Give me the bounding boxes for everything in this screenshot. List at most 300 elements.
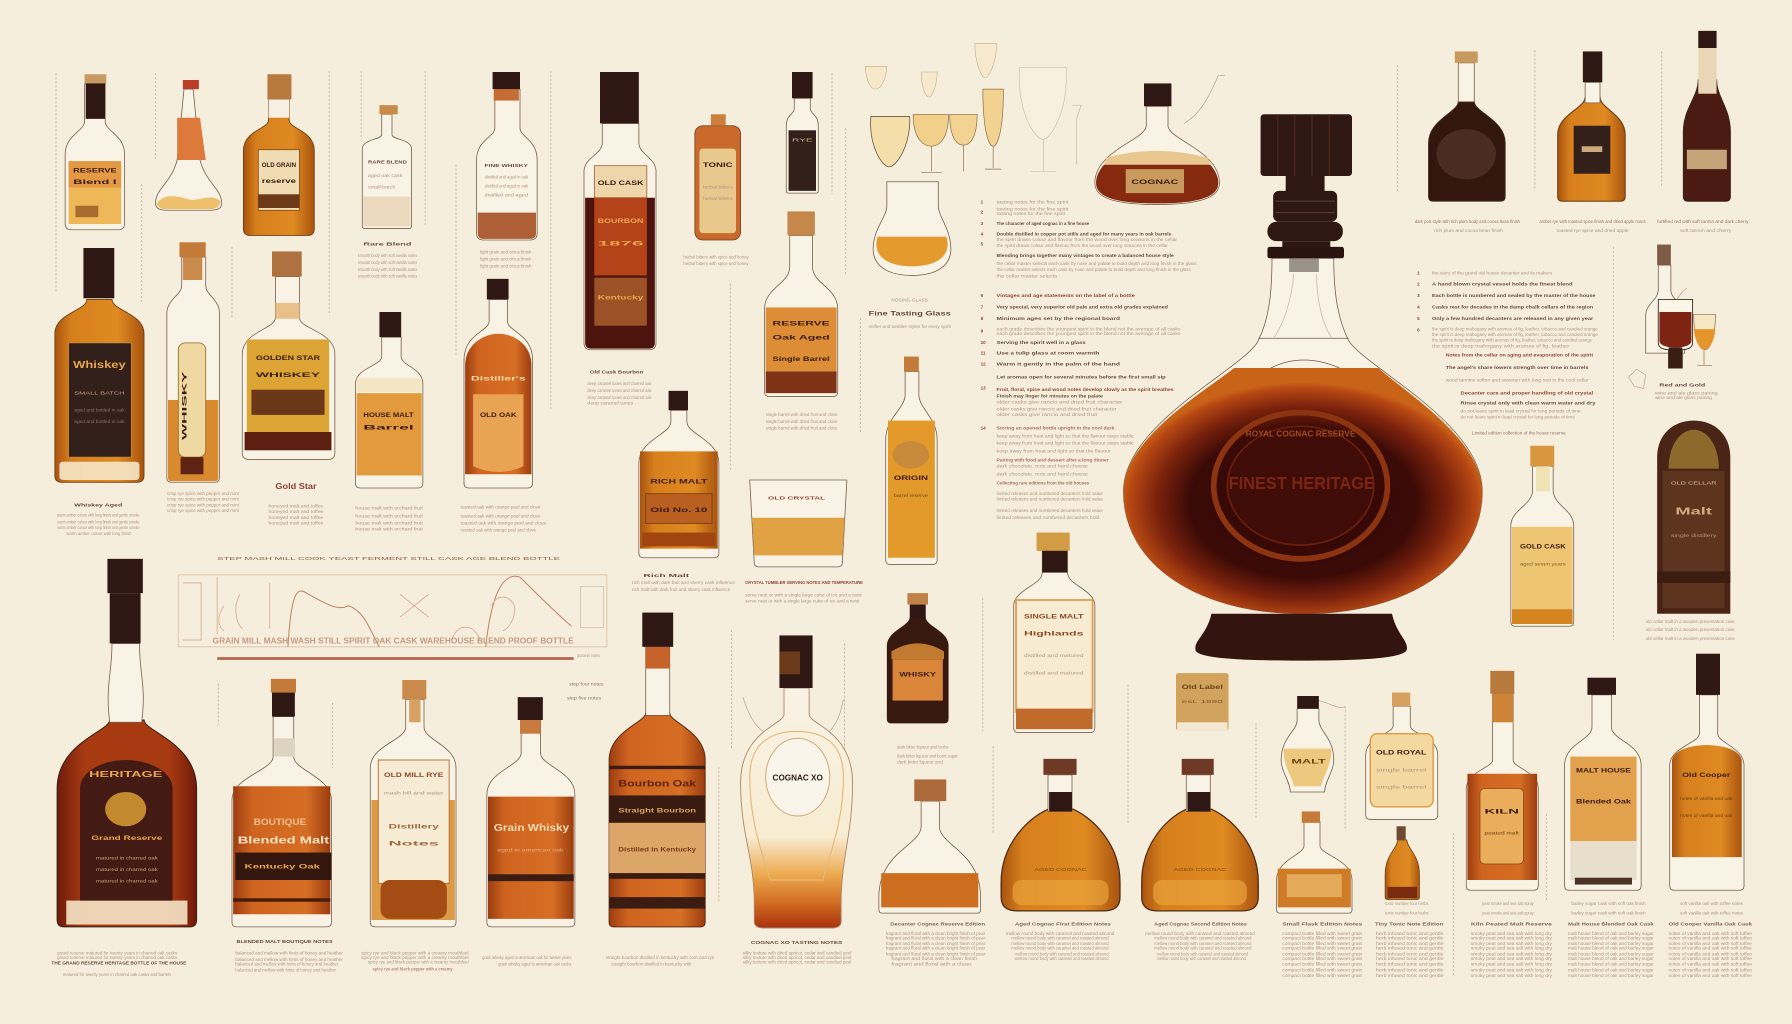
- captions: bottom right columns: malt house blend of oak and barley sugar: [1568, 967, 1654, 972]
- bottle: round amber one: [1001, 759, 1120, 911]
- captions: right text column: Notes from the cellar on aging and evaporation of the spirit: [1446, 353, 1594, 358]
- glass: whiskey tumbler: [750, 480, 847, 567]
- captions: centre text column: older casks give rancio and dried fruit character: [997, 406, 1117, 411]
- bottle: red-orange with black band: Kentucky Oak: [245, 864, 320, 871]
- captions: centre text column: the spirit draws colour and flavour from the wood over long seasons in the cellar: [997, 243, 1169, 248]
- bottle: large deep red with dark label: [57, 559, 197, 927]
- captions: centre text column: the cellar master selects each cask by nose and palate to build depth and long finish in the glass: [997, 261, 1197, 266]
- glasses: champagne group: [865, 43, 1081, 173]
- captions: bottom right columns: smoky peat and sea salt with long dry: [1471, 951, 1553, 956]
- bottle: amber short: [639, 391, 719, 558]
- captions: bottom right columns: fragrant and floral with a clean: [891, 962, 972, 967]
- chart: distillery process map: step five notes: [567, 695, 601, 700]
- bottle: orange tall with clear base: Old Cooper: [1682, 772, 1731, 779]
- bottle: clear neck orange body: [487, 697, 575, 927]
- captions: second row: CRYSTAL TUMBLER SERVING NOTES AND TEMPERATURE: [745, 580, 863, 585]
- captions: centre text column: 7: [981, 305, 984, 310]
- captions: bottom right columns: compact bottle filled with sweet grain: [1282, 946, 1363, 951]
- captions: bottom right columns: smoky peat and sea salt with long dry: [1471, 931, 1553, 936]
- small label card: Old Label: [1182, 684, 1223, 691]
- bottle: cream label amber base: mash bill and water: [384, 790, 444, 795]
- captions: centre text column: each grade describes the youngest spirit in the blend not the average of all casks: [997, 331, 1181, 336]
- captions: centre text column: limited releases and numbered decanters hold value: [997, 508, 1104, 513]
- captions: second row: honeyed malt and toffee: [269, 515, 324, 520]
- bottle: dark wine style: [1683, 31, 1730, 201]
- captions: bottom right columns: fragrant and floral with a clean bright finish of pear: [886, 946, 986, 951]
- bottle: tall orange with bands: Distilled in Kentucky: [618, 846, 696, 853]
- bottle: clear with amber label: [65, 74, 125, 230]
- captions: centre text column: limited releases and numbered decanters hold value: [997, 497, 1104, 502]
- captions: centre text column: Double distilled in copper pot stills and aged for many years in oak barrels: [997, 231, 1172, 236]
- captions: second row: serve neat or with a single large cube of ice and a twist: [745, 598, 860, 603]
- captions: bottom left row: silky texture with dried apricot, cedar and candied peel: [743, 955, 852, 960]
- bottle: tall orange: ORIGIN: [894, 475, 928, 482]
- bottle: orange tall with clear base: [1670, 654, 1744, 890]
- captions: bottom right columns: smoky peat and sea salt with long dry: [1471, 941, 1553, 946]
- captions: top right bottles: dark port style with rich plum body and cocoa bean finish: [1415, 219, 1521, 224]
- captions: top right bottles: dark bitter liqueur and burnt sugar: [897, 754, 958, 759]
- bottle: orange round shoulder: [464, 279, 533, 488]
- captions: top row: deep caramel tones and charred oak: [587, 381, 652, 386]
- captions: top row: herbal bitters with spice and honey: [683, 261, 750, 266]
- bottle: flask with red cap: [155, 80, 222, 210]
- captions: bottom left row: silky texture with dried apricot, cedar and candied peel: [743, 950, 852, 955]
- captions: bottom right columns: herb infused tonic and gentle: [1376, 935, 1444, 940]
- captions: centre text column: 3: [981, 221, 984, 226]
- captions: centre text column: limited releases and numbered decanters hold: [997, 515, 1100, 520]
- captions: bottom right columns: malt house blend of oak and barley sugar: [1568, 941, 1654, 946]
- bottle: clear with amber label: RESERVE: [73, 168, 117, 175]
- bottle: amber with cream label: OLD GRAIN: [262, 162, 296, 169]
- captions: bottom right columns: herb infused tonic and gentle: [1376, 956, 1444, 961]
- captions: centre text column: 9: [981, 329, 984, 334]
- captions: top right bottles: dark bitter liqueur and: [897, 759, 944, 764]
- bottle: pale yellow amber: [1511, 446, 1574, 626]
- captions: bottom right columns: soft vanilla oak with toffee notes: [1680, 910, 1743, 915]
- captions: centre text column: 10: [981, 340, 986, 345]
- bottle: orange round shoulder: OLD OAK: [480, 412, 517, 419]
- bottle: clear with red base: [477, 72, 537, 240]
- captions: centre text column: Serving the spirit well in a glass: [997, 340, 1086, 345]
- bottle: clear neck orange body: aged in american oak: [497, 847, 565, 852]
- captions: centre text column: the cellar master selects each cask by nose and palate to build depth and long finish in the glass: [997, 267, 1191, 272]
- bottle: large deep red with dark label: matured in charred oak: [96, 855, 159, 860]
- captions: bottom right columns: fragrant and floral with a clean bright finish of pear: [886, 935, 986, 940]
- bottle: large amber with dark label: aged and bottled in oak: [74, 419, 126, 424]
- captions: top row: light grain and citrus finish: [480, 263, 532, 268]
- captions: second row: warm amber colour with long finish: [66, 531, 132, 536]
- bottle: clear with red base: distilled and aged in oak: [485, 183, 529, 188]
- chart: distillery process map: step four notes: [569, 682, 603, 687]
- bottle: cream label amber base: OLD MILL RYE: [384, 772, 444, 779]
- bottle: amber with cream label: [243, 74, 314, 235]
- captions: centre text column: 4: [981, 231, 984, 236]
- captions: bottom right columns: Kiln Peated Malt Reserve: [1471, 922, 1553, 927]
- captions: bottom right columns: herb infused tonic and gentle: [1376, 941, 1444, 946]
- bottle: golden with dark band: [242, 251, 335, 459]
- captions: bottom right columns: smoky peat and sea salt with long dry: [1471, 967, 1553, 972]
- captions: bottom right columns: compact bottle filled with sweet grain: [1282, 956, 1363, 961]
- captions: bottom right columns: malt house blend of oak and barley sugar: [1568, 951, 1654, 956]
- captions: right text column: do not leave spirit in lead crystal for long periods of time: [1461, 409, 1581, 414]
- captions: centre text column: Warm it gently in the palm of the hand: [997, 362, 1120, 367]
- captions: second row: toasted oak with orange peel and clove: [461, 505, 541, 510]
- captions: centre text column: older casks give rancio and dried fruit character: [997, 399, 1123, 404]
- captions: bottom right columns: Decanter Cognac Reserve Edition: [890, 922, 985, 927]
- captions: top row: single barrel with dried fruit and clove: [766, 419, 838, 424]
- captions: top right bottles: old cellar malt in a wooden presentation case: [1646, 619, 1736, 624]
- bottle: clear with orange label: MALT HOUSE: [1576, 768, 1631, 775]
- captions: centre text column: keep away from heat and light so that the flavour stays stable: [997, 434, 1135, 439]
- captions: right text column: The angel's share lowers strength over time in barrels: [1446, 365, 1589, 370]
- captions: top row: smooth body with soft vanilla notes: [358, 260, 417, 265]
- captions: top row: Rare Blend: [363, 242, 412, 247]
- bottle: pale gold label: single barrel: [1376, 767, 1426, 772]
- glass: snifter: [873, 182, 951, 275]
- captions: bottom left row: balanced and mellow with hints of honey and heather: [235, 967, 337, 972]
- captions: bottom right columns: peat smoke and sea salt spray: [1482, 901, 1535, 906]
- captions: second row: toasted oak with orange peel and clove: [461, 514, 541, 519]
- bottle: amber with cream top: [355, 312, 423, 488]
- captions: second row: Gold Star: [275, 482, 317, 491]
- captions: right text column: A hand blown crystal vessel holds the finest blend: [1432, 282, 1573, 287]
- captions: bottom left row: COGNAC XO TASTING NOTES: [751, 940, 842, 945]
- captions: bottom right columns: notes of vanilla and oak with soft toffee: [1669, 931, 1753, 936]
- captions: bottom right columns: Old Cooper Vanilla Oak Cask: [1669, 922, 1753, 927]
- captions: bottom right columns: compact bottle filled with sweet grain: [1282, 935, 1363, 940]
- bottle: cream label tall: distilled and matured: [1024, 653, 1085, 658]
- bottle: clear with red base: distilled and aged: [485, 193, 529, 198]
- captions: second row: rich malt with dark fruit and sherry cask influence: [632, 580, 736, 585]
- bottle: clear with orange label: RESERVE: [773, 321, 830, 328]
- captions: centre text column: The character of aged cognac in a fine house: [997, 221, 1090, 226]
- bottle: pale gold label: single barrel: [1376, 785, 1426, 790]
- captions: centre text column: 1: [981, 199, 984, 204]
- bottle: large deep red with dark label: HERITAGE: [89, 770, 163, 779]
- captions: right text column: [1417, 270, 1598, 435]
- bottle: tall deep red: 1876: [598, 241, 644, 248]
- bottle: tall orange with bands: Bourbon Oak: [618, 778, 697, 788]
- captions: top row: smooth body with soft vanilla notes: [358, 267, 417, 272]
- captions: bottom right columns: fragrant and floral with a clean bright finish of pear: [886, 931, 986, 936]
- captions: top right bottles: old cellar malt in a wooden presentation case: [1646, 636, 1736, 641]
- bottle: small dark: [786, 72, 818, 193]
- captions: top right bottles: rich plum and cocoa bean finish: [1434, 228, 1504, 233]
- captions: bottom left row: [51, 939, 852, 977]
- captions: bottom right columns: compact bottle filled with sweet grain: [1282, 941, 1363, 946]
- bottle: red-orange with black band: BOUTIQUE: [254, 817, 306, 827]
- captions: bottom left row: straight bourbon distilled in kentucky with: [611, 962, 692, 967]
- captions: bottom left row: THE GRAND RESERVE HERITAGE BOTTLE OF THE HOUSE: [51, 961, 186, 966]
- bottle: clear fluted with oval label: COGNAC XO: [773, 774, 823, 783]
- captions: bottom right columns: compact bottle filled with sweet grain: [1282, 931, 1363, 936]
- captions: bottom right columns: barley sugar cask with soft oak finish: [1571, 910, 1646, 915]
- bottle: golden with dark band: WHISKEY: [256, 372, 321, 379]
- captions: right text column: Rinse crystal only with clean warm water and dry: [1461, 401, 1596, 406]
- captions: bottom right columns: fragrant and floral with a clean finish: [891, 956, 978, 961]
- captions: bottom right columns: mellow round body with caramel and roasted almond: [1154, 941, 1252, 946]
- captions: second row: house malt with orchard fruit: [355, 526, 424, 531]
- captions: bottom left row: matured for twenty years in charred oak casks and barrels: [63, 972, 171, 977]
- captions: bottom right columns: notes of vanilla and oak with soft toffee: [1669, 951, 1753, 956]
- captions: right text column: Decanter care and proper handling of old crystal: [1461, 390, 1593, 395]
- captions: bottom right columns: notes of vanilla and oak with soft toffee: [1669, 962, 1753, 967]
- captions: right text column: the spirit is deep mahogany with aromas of fig, leather, tobacco and candied orange: [1432, 338, 1593, 343]
- bottle: orange tall narrow: [1466, 671, 1538, 890]
- captions: second row: serve neat or with a single large cube of ice and a twist: [745, 593, 863, 598]
- bottle: round amber one: AGED COGNAC: [1034, 867, 1087, 872]
- bottle: small dark: RYE: [792, 138, 813, 143]
- captions: top row: single barrel with dried fruit and clove: [766, 426, 838, 431]
- bottle: amber with dark label: [1558, 51, 1625, 201]
- captions: top row: single barrel with dried fruit and clove: [766, 412, 838, 417]
- captions: second row: toasted oak with orange peel and clove: [461, 521, 547, 526]
- captions: top right bottles: fortified red with soft tannin and dark cherry: [1657, 219, 1750, 224]
- bottle: clear with orange label: [1565, 678, 1641, 890]
- captions: bottom right columns: herb infused tonic and gentle: [1376, 946, 1444, 951]
- bottle: large deep red with dark label: Grand Reserve: [91, 835, 163, 842]
- bottle: cream label amber base: Notes: [389, 841, 439, 848]
- bottle: round flask: COGNAC: [1131, 179, 1178, 186]
- captions: bottom right columns: compact bottle filled with sweet grain: [1282, 962, 1363, 967]
- bottle: amber with cream top: HOUSE MALT: [363, 412, 415, 419]
- captions: top row: deep caramel tones and charred oak: [587, 395, 652, 400]
- bottle: round amber two: [1142, 759, 1258, 911]
- bottle: tall orange with bands: [609, 613, 705, 927]
- panel: arched dark label: OLD CELLAR: [1671, 481, 1717, 486]
- bottle: clear with red base: FINE WHISKY: [485, 163, 528, 168]
- captions: bottom right columns: smoky peat and sea salt with long dry: [1471, 935, 1553, 940]
- bottle: large amber with dark label: Whiskey: [73, 360, 126, 371]
- bottle: cream label tall: [1014, 533, 1095, 733]
- captions: centre text column: keep away from heat and light so that the flavour: [997, 449, 1112, 454]
- captions: centre text column: Let aromas open for several minutes before the first small sip: [997, 374, 1166, 379]
- captions: bottom left row: grain whisky aged in american oak casks: [498, 962, 571, 967]
- bottle: tall orange with bands: Straight Bourbon: [618, 808, 696, 815]
- captions: bottom right columns: herb infused tonic and gentle: [1376, 962, 1444, 967]
- captions: bottom left row: balanced and mellow with hints of honey and heather: [235, 957, 344, 962]
- captions: bottom right columns: peat smoke and sea salt spray: [1482, 910, 1535, 915]
- bottle: amber short: Old No. 10: [650, 507, 708, 514]
- captions: centre text column: tasting notes for the fine spirit: [997, 199, 1070, 204]
- captions: centre text column: [869, 199, 1197, 520]
- captions: bottom right columns: mellow round body with caramel and roasted almond: [1154, 946, 1252, 951]
- captions: centre text column: the spirit draws colour and flavour from the wood over long seasons in the cellar: [997, 237, 1178, 242]
- captions: top right bottles: soft tannin and cherry: [1680, 228, 1733, 233]
- captions: second row: house malt with orchard fruit: [355, 514, 424, 519]
- bottle: clear with red base: distilled and aged in oak: [485, 174, 529, 179]
- captions: bottom right columns: notes of vanilla and oak with soft toffee: [1669, 967, 1753, 972]
- captions: bottom right columns: Aged Cognac Second Edition Notes: [1154, 922, 1247, 927]
- bottle: tall deep red: BOURBON: [598, 218, 644, 225]
- panel: arched dark label: Malt: [1675, 506, 1713, 517]
- captions: centre text column: dark chocolate, nuts and hard cheese: [997, 463, 1089, 468]
- captions: centre text column: Storing an opened bottle upright in the cool dark: [997, 426, 1115, 431]
- bottle: tall deep red: Kentucky: [598, 294, 644, 301]
- bottle: orange flask: herbal bitters: [703, 196, 733, 201]
- captions: top right bottles: old cellar malt in a wooden presentation case: [1646, 627, 1736, 632]
- captions: bottom right columns: Small Flask Edition Notes: [1282, 922, 1363, 927]
- captions: centre text column: tasting notes for the fine spirit: [997, 211, 1066, 216]
- captions: top right bottles: Red and Gold: [1659, 382, 1705, 387]
- captions: bottom right columns: compact bottle filled with sweet grain: [1282, 967, 1363, 972]
- captions: bottom right columns: compact bottle filled with sweet grain: [1282, 951, 1363, 956]
- bottle: tiny orange: [1385, 826, 1419, 899]
- captions: centre text column: Collecting rare editions from the old houses: [997, 481, 1090, 486]
- bottle: large amber with dark label: aged and bottled in oak: [74, 407, 126, 412]
- captions: bottom right columns: malt house blend of oak and barley sugar: [1568, 935, 1654, 940]
- captions: bottom left row: spicy rye and black pepper with a creamy mouthfeel: [361, 950, 469, 955]
- captions: second row: house malt with orchard fruit: [355, 506, 424, 511]
- bottle: pale small: RARE BLEND: [368, 159, 408, 164]
- bottle: orange flask: TONIC: [703, 162, 733, 169]
- captions: top row: deep caramel tones and charred oak: [587, 388, 652, 393]
- captions: right text column: Limited edition collection of the house reserve: [1472, 430, 1567, 435]
- bottle: large amber with dark label: SMALL BATCH: [74, 390, 125, 395]
- captions: centre text column: keep away from heat and light so that the flavour stays stable: [997, 441, 1135, 446]
- captions: bottom left row: silky texture with dried apricot, cedar and candied peel: [743, 959, 852, 964]
- bottle: tall clear with cream label: [167, 242, 219, 482]
- small label card: est. 1890: [1182, 699, 1225, 704]
- captions: bottom right columns: mellow round body with caramel and roasted almond: [1015, 951, 1109, 956]
- captions: second row: rich malt with dark fruit and sherry cask influence: [632, 587, 731, 592]
- captions: bottom right columns: tonic number four herbs: [1385, 910, 1429, 915]
- captions: bottom right columns: smoky peat and sea salt with long dry: [1471, 973, 1553, 978]
- bottle: cream label tall: SINGLE MALT: [1024, 613, 1084, 620]
- captions: bottom left row: balanced and mellow with hints of honey and heather: [235, 962, 339, 967]
- captions: top right bottles: wine and ale glass pairing: [1655, 395, 1713, 400]
- bottle: dark brown tan cork: [1429, 51, 1505, 201]
- bottle: pale small: small batch: [368, 185, 396, 190]
- chart: distillery process map: process notes: [577, 653, 600, 658]
- captions: top right bottles: toasted rye spice and dried apple: [1557, 228, 1629, 233]
- captions: right text column: 2: [1417, 282, 1420, 287]
- captions: bottom right columns: barley sugar cask with soft oak finish: [1571, 901, 1646, 906]
- bottle: pale gold label: OLD ROYAL: [1376, 749, 1426, 756]
- captions: right text column: the spirit is deep mahogany with aromas of fig, leather: [1432, 343, 1570, 348]
- captions: bottom right columns: notes of vanilla and oak with soft toffee: [1669, 935, 1753, 940]
- captions: bottom left row: BLENDED MALT BOUTIQUE NOTES: [237, 939, 333, 944]
- bottle: red-orange with black band: [232, 679, 331, 927]
- captions: second row: honeyed malt and toffee: [269, 503, 324, 508]
- captions: second row: crisp rye spice with pepper and mint: [167, 502, 240, 507]
- bottle: small clear amber base: [1277, 811, 1352, 913]
- captions: bottom right columns: mellow round body with caramel and roasted almond: [1154, 935, 1252, 940]
- captions: bottom right columns: notes of vanilla and oak with soft toffee: [1669, 973, 1753, 978]
- bottle: pale gold label: [1366, 693, 1438, 819]
- captions: bottom right columns: herb infused tonic and gentle: [1376, 967, 1444, 972]
- captions: second row: crisp rye spice with pepper and mint: [167, 508, 240, 513]
- captions: centre text column: 2: [981, 210, 984, 215]
- captions: top right bottles: dark bitter liqueur and herbs: [897, 745, 949, 750]
- bottle: small pale golden: [1281, 696, 1334, 792]
- captions: bottom left row: balanced and mellow with hints of honey and heather: [235, 950, 344, 955]
- glass: whiskey tumbler: OLD CRYSTAL: [768, 495, 826, 500]
- captions: right text column: the spirit is deep mahogany with aromas of fig, leather, tobacco and candied orange: [1432, 332, 1598, 337]
- bottle: red-orange with black band: Blended Malt: [238, 835, 330, 846]
- bottle: pale yellow amber: GOLD CASK: [1520, 544, 1566, 551]
- bottle: clear with amber label: Blend I: [73, 179, 117, 186]
- captions: bottom left row: spicy rye and black pepper with a creamy: [373, 966, 453, 971]
- captions: centre text column: limited releases and numbered decanters hold value: [997, 491, 1104, 496]
- captions: top row: light grain and citrus finish: [480, 250, 532, 255]
- captions: right text column: do not leave spirit in lead crystal for long periods of time: [1461, 414, 1576, 419]
- bottle: cream label tall: Highlands: [1024, 630, 1084, 637]
- bottle: orange round shoulder: Distiller's: [471, 376, 526, 383]
- captions: right text column: 1: [1417, 270, 1420, 275]
- captions: right text column: 3: [1417, 293, 1420, 298]
- bottle: amber with cream top: Barrel: [363, 425, 414, 432]
- bottle: clear with amber base: [879, 779, 981, 913]
- bottle: pale small: aged oak cask: [368, 173, 403, 178]
- captions: top row: [358, 242, 838, 431]
- bottle: pale small: [362, 105, 411, 229]
- captions: bottom right columns: Malt House Blended Oak Cask: [1568, 922, 1654, 927]
- captions: bottom right columns: compact bottle filled with sweet grain: [1282, 973, 1363, 978]
- captions: bottom right columns: mellow round body with caramel and roasted almond: [1157, 956, 1246, 961]
- bottle: round flask: [1095, 83, 1219, 205]
- captions: top row: deep caramel tones: [587, 401, 633, 406]
- captions: bottom right columns: fragrant and floral with a clean bright finish of pear: [886, 951, 986, 956]
- bottle: tall orange: [886, 357, 937, 565]
- bottle: round amber two: AGED COGNAC: [1174, 867, 1226, 872]
- captions: bottom right columns: Aged Cognac First Edition Notes: [1015, 922, 1111, 927]
- hero: large decanter: [1123, 114, 1482, 661]
- captions: bottom right columns: mellow round body with caramel and roasted almond: [1145, 931, 1256, 936]
- bottle: tall deep red: OLD CASK: [598, 180, 643, 187]
- captions: top row: smooth body with soft vanilla notes: [358, 253, 417, 258]
- captions: right text column: Each bottle is numbered and sealed by the master of the house: [1432, 293, 1596, 298]
- chart: distillery process map: GRAIN MILL MASH WASH STILL SPIRIT OAK CASK WAREHOUSE BLEND PROOF BOTTLE: [213, 636, 574, 645]
- captions: bottom right columns: malt house blend of oak and barley sugar: [1568, 973, 1654, 978]
- bottle: cream label amber base: Distillery: [389, 824, 439, 831]
- captions: centre text column: dark chocolate, nuts and hard cheese: [997, 471, 1089, 476]
- small label card: [1176, 673, 1229, 730]
- captions: second row: honeyed malt and toffee: [269, 521, 324, 526]
- bottle: clear with orange label: Blended Oak: [1576, 798, 1631, 805]
- captions: bottom right columns: Tiny Tonic Note Edition: [1375, 922, 1444, 927]
- bottle: large amber with dark label: [55, 248, 144, 482]
- captions: centre text column: Finish may linger for minutes on the palate: [997, 394, 1103, 399]
- bottle: orange flask: [695, 114, 741, 240]
- captions: bottom right columns: mellow round body with caramel and roasted almond: [1011, 941, 1109, 946]
- bottle: clear with orange label: [765, 211, 838, 397]
- captions: second row: crisp rye spice with pepper and mint: [167, 491, 240, 496]
- captions: top right bottles: [897, 219, 1750, 764]
- captions: right text column: wood tannins soften and sweeten with long rest in the cool cellar: [1446, 378, 1589, 383]
- captions: second row: toasted oak with orange peel and clove: [461, 527, 537, 532]
- captions: centre text column: 13: [981, 386, 986, 391]
- captions: right text column: the spirit is deep mahogany with aromas of fig, leather, tobacco and candied orange: [1432, 326, 1598, 331]
- captions: top right bottles: amber rye with toasted spice finish and dried apple notes: [1539, 219, 1646, 224]
- captions: right text column: the story of the grand old house decanter and its makers: [1432, 270, 1552, 275]
- captions: right text column: Only a few hundred decanters are released in any given year: [1432, 316, 1593, 321]
- chart: distillery process map: [178, 556, 607, 700]
- chart: distillery process map: STEP MASH MILL COOK YEAST FERMENT STILL CASK AGE BLEND BOTTLE: [217, 556, 561, 561]
- captions: bottom right columns: mellow round body with caramel and roasted almond: [1157, 951, 1249, 956]
- bottle: tall deep red: [584, 72, 656, 350]
- captions: bottom left row: grand reserve matured for twenty years in charred oak casks: [57, 955, 177, 960]
- captions: centre text column: Minimum ages set by the regional board: [997, 316, 1120, 321]
- captions: bottom right columns: notes of vanilla and oak with soft toffee: [1669, 941, 1753, 946]
- captions: second row: [57, 482, 863, 603]
- captions: bottom right columns: malt house blend of oak and barley sugar: [1568, 956, 1654, 961]
- bottle: clear fluted with oval label: [741, 635, 853, 928]
- captions: right text column: 5: [1417, 316, 1420, 321]
- captions: second row: Rich Malt: [643, 573, 690, 578]
- captions: second row: warm amber colour with long finish and gentle smoke: [57, 525, 140, 530]
- bottle: orange flask: herbal bitters: [703, 185, 733, 190]
